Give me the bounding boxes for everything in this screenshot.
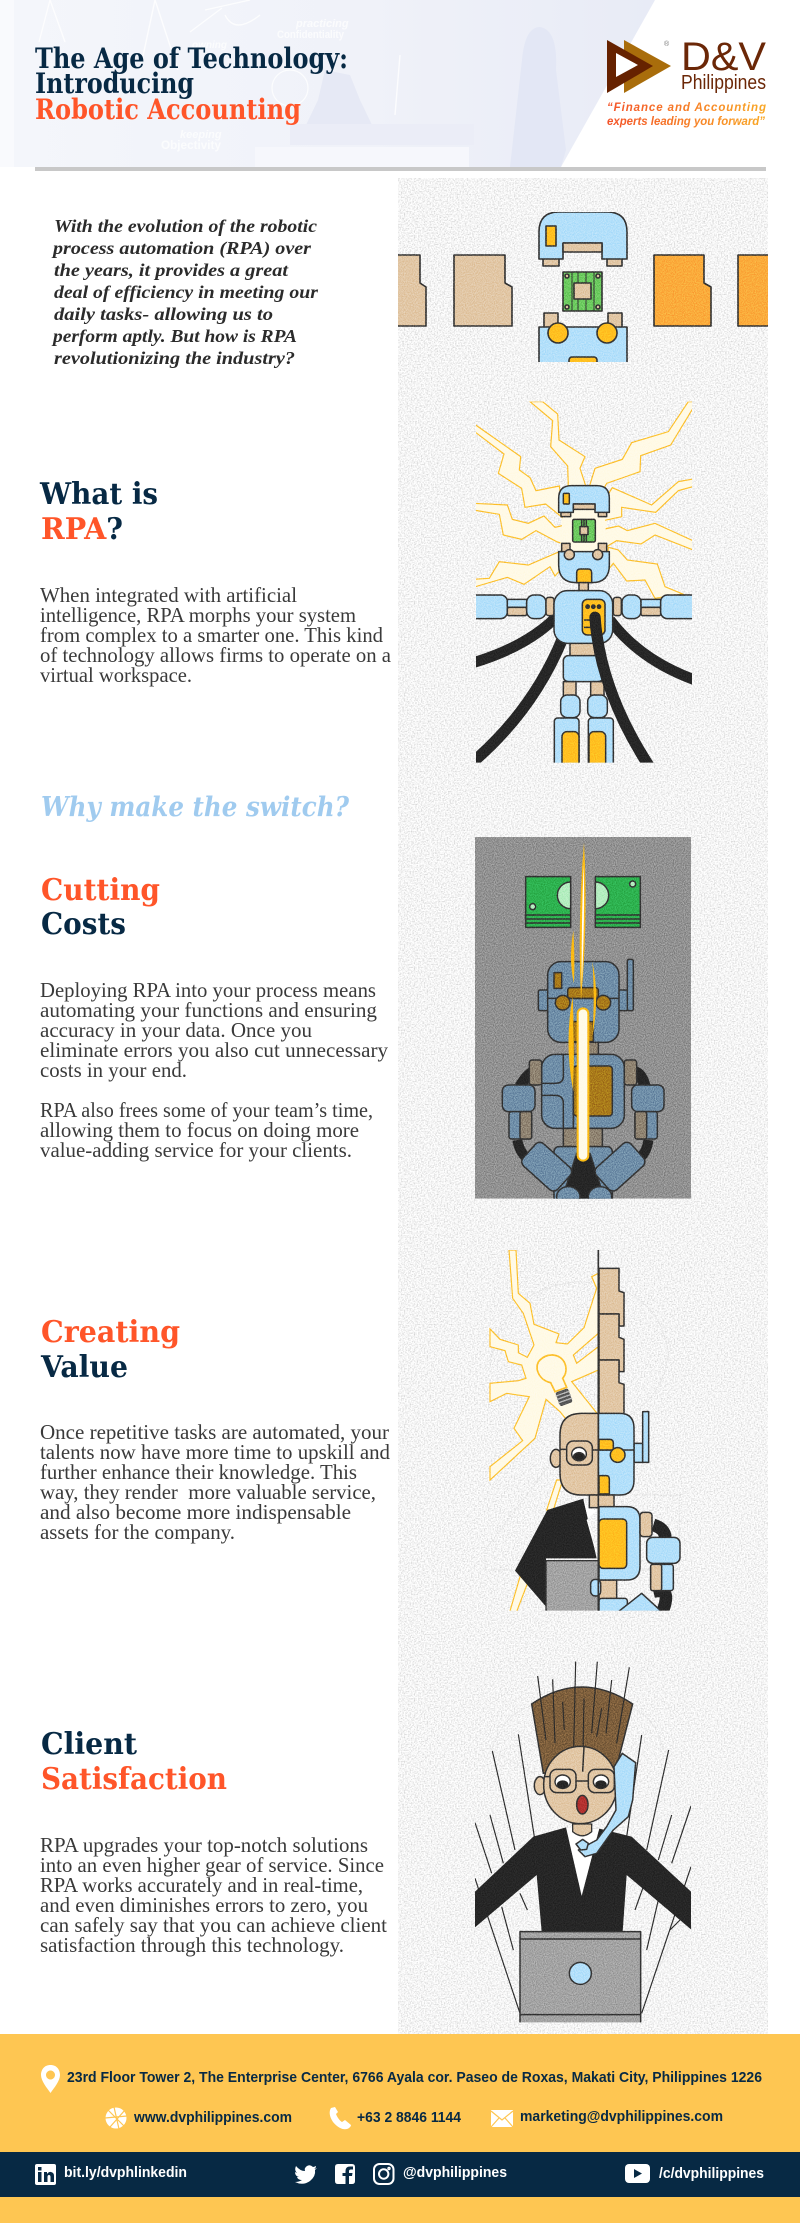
motion spikes — [475, 1734, 691, 2013]
text: cutting costs: RPA also frees some of your team’s time, — [40, 1098, 373, 1122]
text: client satisfaction: and even diminishes errors to zero, you — [40, 1893, 368, 1917]
side cables — [473, 617, 695, 762]
heading: Cutting Costs — [41, 873, 160, 942]
panel: speckled illustration column — [398, 178, 768, 2034]
text: creating value: way, they render more valuable service, — [40, 1480, 376, 1504]
icon: linkedin — [35, 2164, 56, 2185]
logo: D&V Philippines: D&V — [681, 35, 766, 79]
phone number: +63 2 8846 1144 — [357, 2109, 462, 2126]
icon: location pin — [41, 2065, 60, 2093]
text: creating value: assets for the company. — [40, 1520, 235, 1544]
illustration: robot pulled apart between folders — [390, 212, 775, 372]
laser beams — [568, 843, 596, 1161]
suit — [475, 1824, 691, 1932]
robot torso and legs — [554, 591, 613, 768]
logo: D&V Philippines: Philippines — [681, 72, 766, 94]
heading: Creating Value — [40, 1315, 180, 1385]
faint circle outline — [492, 1703, 673, 2007]
faint person outline — [485, 1282, 679, 1570]
footer: contact band — [0, 2034, 800, 2223]
text: creating value: talents now have more time to upskill and — [40, 1440, 390, 1464]
header banner background: keeping — [180, 129, 222, 141]
intro text: perform aptly. But how is RPA — [51, 326, 297, 346]
address: 23rd Floor Tower 2, The Enterprise Center, 6766 Ayala cor. Paseo de Roxas, Makati City, Philippines 1226 — [67, 2069, 762, 2086]
robot head — [559, 486, 609, 591]
logo: D&V Philippines — [607, 35, 766, 128]
illustration: electrified robot — [467, 402, 701, 768]
text: client satisfaction: satisfaction through this technology. — [40, 1933, 344, 1957]
icon: facebook — [335, 2164, 355, 2184]
text: cutting costs: value-adding service for your clients. — [40, 1138, 352, 1162]
footer: social band: bit.ly/dvphlinkedin — [64, 2164, 187, 2181]
text: cutting costs: Deploying RPA into your process means — [40, 978, 376, 1002]
laptop — [520, 1932, 641, 2025]
intro text: revolutionizing the industry? — [54, 348, 295, 368]
logo: D&V Philippines: “Finance and Accounting — [607, 102, 766, 114]
heading: What is RPA?: What is — [39, 477, 158, 512]
logo: D&V Philippines: experts leading you forward” — [607, 116, 765, 128]
text: cutting costs: costs in your end. — [40, 1058, 187, 1082]
header banner background — [0, 0, 655, 167]
header banner background: Confidentiality — [277, 29, 345, 41]
text: cutting costs — [40, 978, 388, 1162]
logo: D&V Philippines: ® — [664, 40, 670, 48]
folders — [390, 255, 775, 326]
website: www.dvphilippines.com — [133, 2109, 292, 2126]
intro text: the years, it provides a great — [54, 260, 289, 280]
email: marketing@dvphilippines.com — [520, 2108, 723, 2125]
text: creating value — [40, 1420, 390, 1544]
text: client satisfaction — [40, 1833, 387, 1957]
text: client satisfaction: RPA upgrades your top-notch solutions — [40, 1833, 368, 1857]
title — [35, 42, 348, 126]
text: client satisfaction: RPA works accurately and in real-time, — [40, 1873, 363, 1897]
illustration: robot and money on grey panel — [475, 837, 691, 1207]
money stacks — [526, 877, 640, 927]
icon: phone — [330, 2107, 351, 2129]
illustration: half human half robot — [485, 1250, 680, 1615]
intro text: deal of efficiency in meeting our — [54, 282, 319, 302]
lightning and bulb — [490, 1250, 598, 1613]
heading: Cutting Costs: Cutting — [41, 873, 160, 908]
text: creating value: Once repetitive tasks are automated, your — [40, 1420, 389, 1444]
robot body — [502, 959, 664, 1207]
heading: Client Satisfaction: Satisfaction — [41, 1762, 227, 1797]
flying blue tie — [576, 1753, 636, 1857]
heading: Creating Value: Value — [40, 1350, 128, 1385]
text: cutting costs: accuracy in your data. Once you — [40, 1018, 312, 1042]
head and glasses — [534, 1746, 617, 1824]
icon: twitter — [295, 2165, 317, 2184]
intro text: process automation (RPA) over — [51, 238, 312, 259]
header banner background: Objectivity — [161, 138, 221, 152]
icon: youtube — [625, 2164, 650, 2183]
footer: social band: /c/dvphilippines — [659, 2165, 764, 2182]
text: what is RPA: virtual workspace. — [40, 663, 192, 687]
text: cutting costs: eliminate errors you also cut unnecessary — [40, 1038, 388, 1062]
title: The Age of Technology: — [35, 42, 348, 75]
footer: social band: @dvphilippines — [403, 2164, 507, 2181]
circuit board — [563, 272, 602, 311]
header banner background: practicing — [295, 18, 349, 30]
icon: globe — [105, 2107, 127, 2129]
intro text — [51, 216, 319, 368]
footer: social band — [0, 2152, 800, 2197]
text: cutting costs: automating your functions and ensuring — [40, 998, 377, 1022]
text: what is RPA: from complex to a smarter one. This kind — [40, 623, 383, 647]
icon: envelope — [491, 2110, 513, 2127]
robot head top — [539, 212, 627, 266]
title: Robotic Accounting — [35, 93, 301, 126]
heading: Client Satisfaction: Client — [41, 1727, 137, 1762]
text: what is RPA: intelligence, RPA morphs your system — [40, 603, 356, 627]
text: what is RPA: When integrated with artificial — [40, 583, 297, 607]
text: what is RPA — [40, 583, 392, 687]
center cable — [595, 617, 648, 765]
robot head bottom — [538, 312, 628, 362]
text: cutting costs: allowing them to focus on doing more — [40, 1118, 359, 1142]
robot arms — [467, 595, 701, 619]
subheading: why make the switch: Why make the switch? — [41, 792, 350, 823]
illustration: surprised client with laptop — [475, 1662, 691, 2025]
heading: Cutting Costs: Costs — [41, 907, 126, 942]
suit and laptop — [515, 1495, 614, 1612]
heading: What is RPA? — [39, 477, 158, 547]
heading: What is RPA?: RPA? — [41, 512, 123, 547]
icon: instagram — [374, 2164, 394, 2184]
text: creating value: further enhance their knowledge. This — [40, 1460, 357, 1484]
stacked tan blocks — [599, 1268, 624, 1414]
intro text: With the evolution of the robotic — [54, 216, 317, 236]
text: what is RPA: of technology allows firms to operate on a — [40, 643, 392, 667]
heading: Client Satisfaction — [41, 1727, 227, 1797]
half human half robot head — [550, 1412, 649, 1495]
hair — [532, 1662, 633, 1773]
title: Introducing — [35, 67, 194, 100]
text: creating value: and also become more indispensable — [40, 1500, 351, 1524]
heading: Creating Value: Creating — [41, 1315, 180, 1350]
robot half body — [591, 1507, 680, 1615]
header banner background: owning — [192, 40, 227, 51]
intro text: daily tasks- allowing us to — [54, 304, 273, 324]
text: client satisfaction: can safely say that you can achieve client — [40, 1913, 387, 1937]
text: client satisfaction: into an even higher gear of service. Since — [40, 1853, 384, 1877]
lightning bolts — [473, 402, 695, 598]
